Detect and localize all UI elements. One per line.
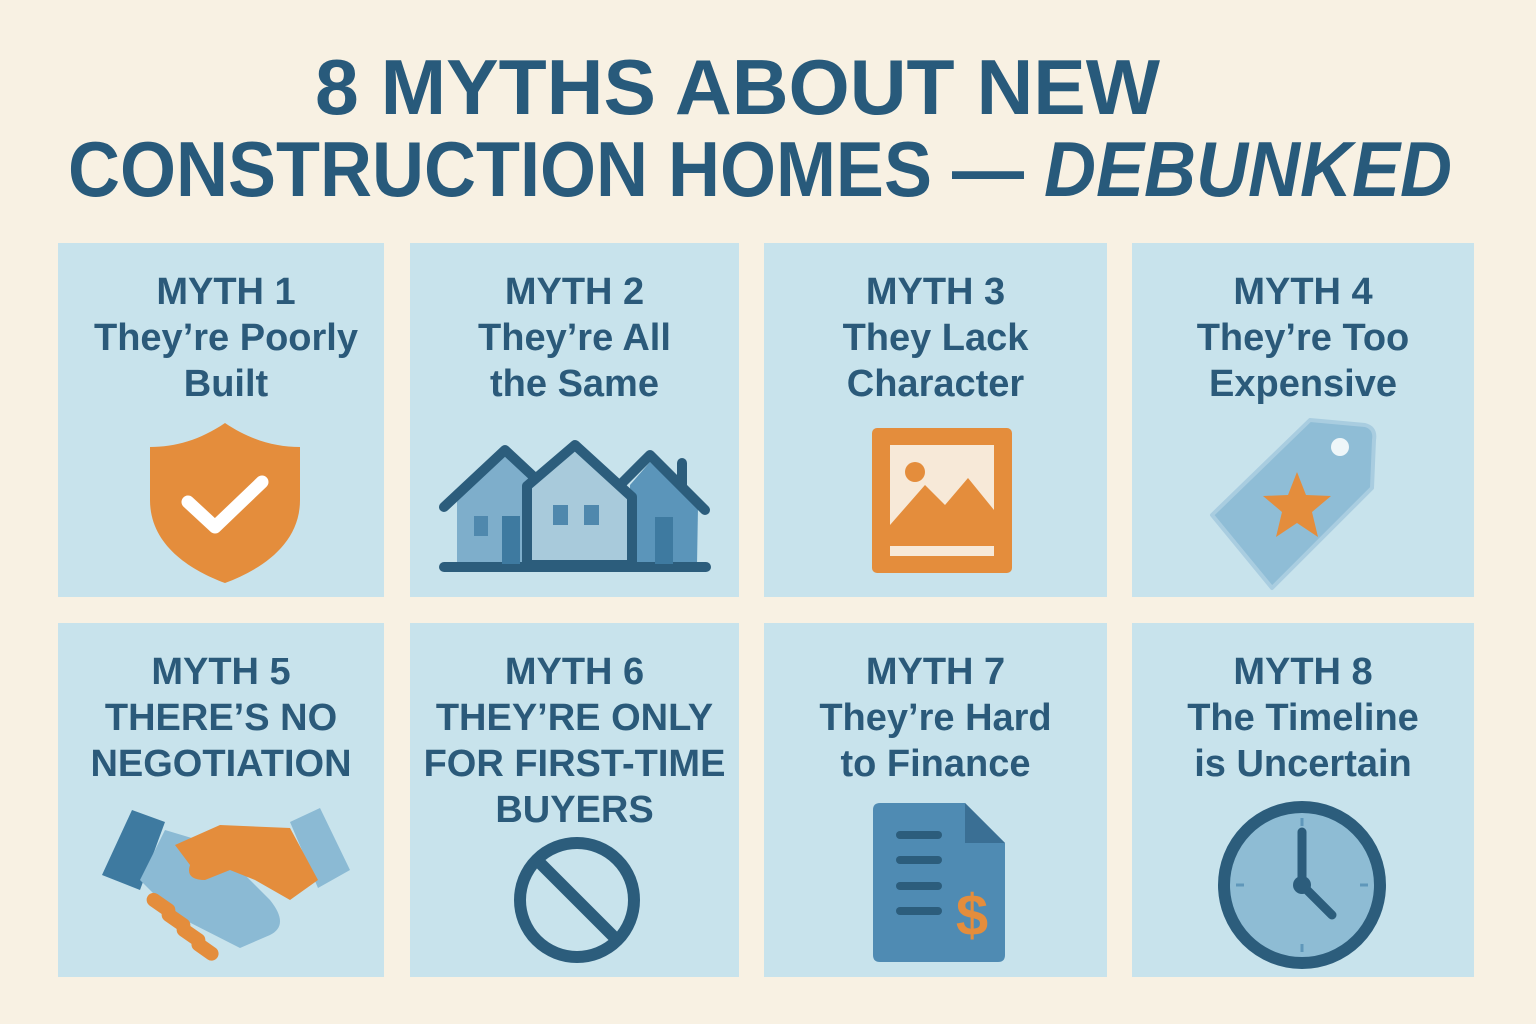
panel: myth 2 <box>410 243 739 597</box>
panel: myth 1: They’re Poorly <box>94 317 358 359</box>
panel: myth 3: They Lack <box>843 317 1028 359</box>
panel: myth 5 <box>58 623 384 977</box>
panel: myth 5: THERE’S NO <box>105 697 337 739</box>
panel: myth 4 <box>1132 243 1474 597</box>
icon: houses <box>439 440 711 572</box>
panel: myth 2: the Same <box>490 363 659 405</box>
icon: clock <box>1218 801 1386 969</box>
icon: picture <box>872 428 1012 573</box>
panel: myth 3: MYTH 3 <box>866 271 1005 313</box>
title <box>68 43 1452 213</box>
panel: myth 4: Expensive <box>1209 363 1397 405</box>
panel: myth 7: They’re Hard <box>819 697 1052 739</box>
panel: myth 7: MYTH 7 <box>866 651 1005 693</box>
icon: prohibition <box>514 837 640 963</box>
panel: myth 6: FOR FIRST-TIME <box>424 743 725 785</box>
title: 8 MYTHS ABOUT NEW <box>315 43 1160 131</box>
panel: myth 6: MYTH 6 <box>505 651 644 693</box>
panel: myth 8: The Timeline <box>1187 697 1419 739</box>
panel: myth 4: MYTH 4 <box>1233 271 1373 313</box>
panel: myth 3 <box>764 243 1107 597</box>
icon: shield <box>150 423 300 583</box>
icon: handshake <box>102 808 350 961</box>
panel: myth 3: Character <box>847 363 1024 405</box>
panel: myth 7: to Finance <box>840 743 1031 785</box>
panel: myth 1: MYTH 1 <box>156 271 296 313</box>
panel: myth 1 <box>58 243 384 597</box>
panel: myth 6: BUYERS <box>495 789 654 831</box>
panel: myth 2: MYTH 2 <box>505 271 644 313</box>
panel: myth 8: is Uncertain <box>1194 743 1412 785</box>
panel: myth 6: THEY’RE ONLY <box>436 697 713 739</box>
panel: myth 1: Built <box>184 363 268 405</box>
icon: price tag <box>1210 418 1376 590</box>
icon: document: $ <box>956 883 988 948</box>
panel: myth 8: MYTH 8 <box>1233 651 1373 693</box>
panel: myth 2: They’re All <box>478 317 671 359</box>
panel: myth 4: They’re Too <box>1197 317 1409 359</box>
icon: document <box>873 803 1005 962</box>
title: CONSTRUCTION HOMES — DEBUNKED <box>68 125 1452 213</box>
panel: myth 6 <box>410 623 739 977</box>
panel: myth 7 <box>764 623 1107 977</box>
panel: myth 5: NEGOTIATION <box>90 743 352 785</box>
panel: myth 5: MYTH 5 <box>151 651 291 693</box>
panel: myth 8 <box>1132 623 1474 977</box>
